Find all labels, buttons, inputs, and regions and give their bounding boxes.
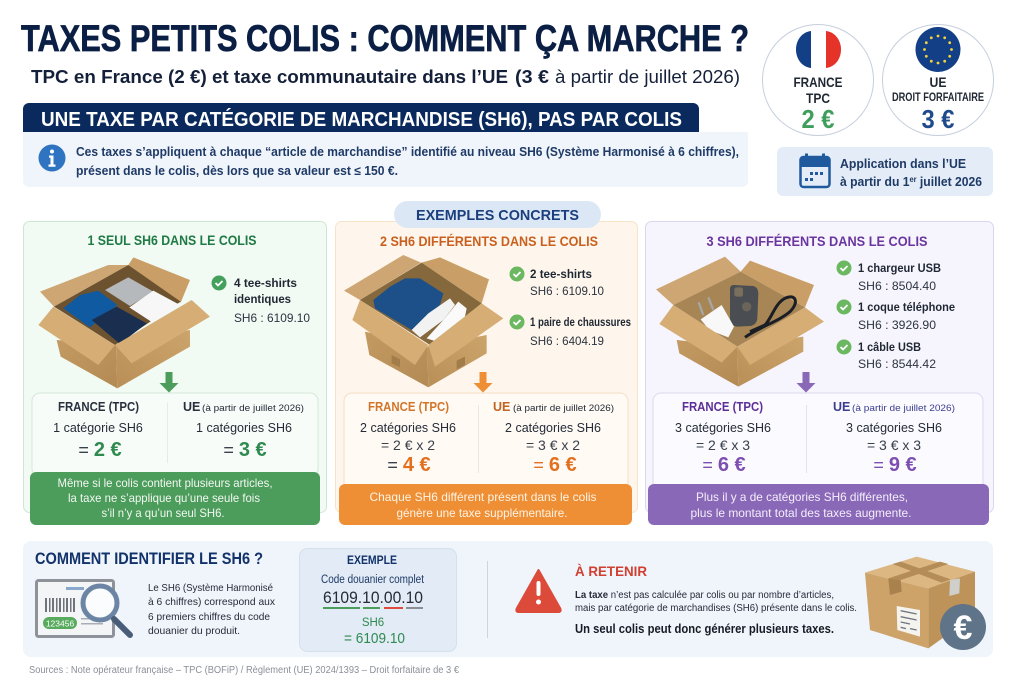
text: à retenir: mais par catégorie de marchandises (SH6) présente dans le colis.: [575, 603, 857, 614]
icon: calendar: [800, 154, 830, 187]
result box: UE: [833, 400, 850, 414]
icon: closed box with euro: [865, 557, 986, 650]
result box: UE: [493, 400, 510, 414]
note: [30, 472, 320, 525]
result box: = 3 € x 2: [526, 437, 580, 453]
subtitle: (3 €: [515, 66, 549, 87]
application text: Application dans l’UE: [840, 156, 966, 171]
icon: EU flag: [916, 27, 960, 72]
info box: [23, 132, 748, 187]
pill: exemples concrets: [394, 201, 601, 228]
item list: 1 coque téléphone: [858, 300, 955, 314]
icon: info: [38, 144, 66, 172]
application text: [840, 156, 982, 189]
note: génère une taxe supplémentaire.: [396, 506, 568, 520]
item list: SH6 : 6404.19: [530, 334, 604, 348]
info text: présent dans le colis, dès lors que sa valeur est ≤ 150 €.: [76, 164, 398, 178]
item list: SH6 : 8544.42: [858, 357, 936, 371]
example box: Code douanier complet: [321, 574, 425, 586]
result box: FRANCE (TPC): [682, 400, 763, 414]
result box: = 2 €: [78, 439, 122, 461]
result box: = 2 € x 2: [381, 437, 435, 453]
text: SH6 explanation: Le SH6 (Système Harmonisé: [148, 582, 273, 594]
item list: [212, 276, 310, 325]
example box: SH6: [362, 617, 384, 629]
badge: France TPC: 2 €: [802, 104, 834, 134]
item list: 1 chargeur USB: [858, 261, 941, 275]
result box: = 3 €: [223, 439, 267, 461]
result box: = 6 €: [702, 454, 746, 476]
result box: [653, 393, 983, 491]
panel heading: 2 SH6 DIFFÉRENTS DANS LE COLIS: [380, 233, 598, 249]
item list: 1 paire de chaussures: [530, 315, 631, 329]
result box: 3 catégories SH6: [846, 421, 942, 435]
badge: UE droit forfaitaire: [882, 24, 994, 136]
application text: er: [909, 175, 917, 184]
result box: = 3 € x 3: [867, 437, 921, 453]
note: plus le montant total des taxes augmente.: [690, 506, 912, 520]
item list: 1 câble USB: [858, 340, 921, 354]
result box: [32, 393, 318, 477]
subtitle: TPC en France (2 €) et taxe communautaire dans l’UE: [31, 66, 508, 87]
note: [339, 484, 632, 525]
note: Chaque SH6 différent présent dans le colis: [370, 490, 596, 504]
result box: (à partir de juillet 2026): [513, 403, 614, 414]
text: à retenir: Un seul colis peut donc générer plusieurs taxes.: [575, 622, 834, 636]
result box: = 2 € x 3: [696, 437, 750, 453]
example box: 6109.10.00.10: [323, 588, 423, 607]
badge: UE droit forfaitaire: DROIT FORFAITAIRE: [892, 90, 984, 104]
panel heading: 3 SH6 DIFFÉRENTS DANS LE COLIS: [706, 233, 928, 249]
result box: = 4 €: [387, 454, 431, 476]
text: SH6 explanation: à 6 chiffres) correspond aux: [148, 596, 276, 608]
item list: SH6 : 6109.10: [234, 311, 310, 325]
badge: UE droit forfaitaire: 3 €: [922, 104, 954, 134]
item list: SH6 : 3926.90: [858, 318, 936, 332]
item list: 2 tee-shirts: [530, 267, 592, 281]
icon: closed box with euro: €: [954, 609, 973, 647]
note: [648, 484, 989, 525]
arrow down: [474, 372, 492, 392]
info text: [76, 145, 739, 178]
text: SH6 explanation: [148, 582, 276, 637]
result box: 2 catégories SH6: [360, 421, 456, 435]
icon: French flag: [796, 31, 841, 68]
icon: barcode label and magnifier: 123456: [46, 618, 74, 628]
icon: box with tee-shirts: [38, 257, 210, 388]
result box: UE: [183, 400, 200, 414]
panel: 1 SH6: [24, 222, 326, 525]
item list: SH6 : 8504.40: [858, 279, 936, 293]
badge: France TPC: FRANCE: [794, 74, 842, 90]
info text: Ces taxes s’appliquent à chaque “article de marchandise” identifié au niveau SH6 (Système Harmonisé à 6 chiffres),: [76, 145, 739, 159]
badge: France TPC: TPC: [806, 90, 830, 106]
result box: (à partir de juillet 2026): [202, 403, 304, 414]
arrow down: [160, 372, 178, 392]
note: s’il n’y a qu’un seul SH6.: [102, 506, 224, 520]
note: Même si le colis contient plusieurs articles,: [58, 476, 272, 490]
note: la taxe ne s’applique qu’une seule fois: [68, 491, 260, 505]
text: à retenir: À RETENIR: [575, 563, 647, 579]
result box: 1 catégories SH6: [196, 421, 292, 435]
badge: UE droit forfaitaire: UE: [930, 74, 946, 90]
application text: à partir du 1: [840, 174, 914, 189]
panel heading: 1 SEUL SH6 DANS LE COLIS: [88, 232, 256, 248]
text: à retenir: [575, 563, 857, 636]
icon: box with charger, phone case and cable: [656, 257, 824, 387]
text: SH6 explanation: douanier du produit.: [148, 625, 240, 637]
sources: Sources : Note opérateur française – TPC (BOFiP) / Règlement (UE) 2024/1393 – Droit forfaitaire de 3 €: [29, 665, 459, 676]
title: TAXES PETITS COLIS : COMMENT ÇA MARCHE ?: [21, 18, 749, 59]
heading: comment identifier: COMMENT IDENTIFIER LE SH6 ?: [35, 550, 263, 568]
result box: FRANCE (TPC): [58, 400, 139, 414]
result box: [344, 393, 628, 491]
section banner: UNE TAXE PAR CATÉGORIE DE MARCHANDISE (SH6), PAS PAR COLIS: [41, 108, 682, 131]
result box: 1 catégorie SH6: [53, 421, 143, 435]
item list: identiques: [234, 292, 291, 306]
note: Plus il y a de catégories SH6 différentes,: [696, 490, 908, 504]
text: SH6 explanation: 6 premiers chiffres du code: [148, 611, 270, 623]
item list: [836, 260, 955, 371]
item list: SH6 : 6109.10: [530, 284, 604, 298]
example box: = 6109.10: [344, 630, 405, 647]
example box: EXEMPLE: [347, 553, 397, 567]
badge: France TPC: [762, 24, 874, 136]
result box: (à partir de juillet 2026): [852, 403, 955, 414]
icon: box with tee-shirts and shoes: [344, 255, 503, 387]
application text: juillet 2026: [917, 174, 982, 189]
arrow down: [796, 372, 816, 392]
item list: 4 tee-shirts: [234, 276, 297, 290]
text: à retenir: La taxe n’est pas calculée par colis ou par nombre d’articles,: [575, 590, 834, 601]
icon: warning triangle: [516, 570, 561, 612]
panel: 2 SH6: [336, 222, 638, 525]
icon: barcode label and magnifier: [36, 580, 130, 636]
item list: [510, 266, 631, 348]
panel: bottom: [23, 541, 993, 657]
subtitle: [31, 66, 740, 87]
result box: = 6 €: [533, 454, 577, 476]
application date box: [777, 147, 993, 196]
example box: [300, 548, 456, 652]
result box: 2 catégories SH6: [505, 421, 601, 435]
result box: = 9 €: [873, 454, 917, 476]
result box: FRANCE (TPC): [368, 400, 449, 414]
panel: 3 SH6: [646, 222, 994, 525]
pill: exemples concrets: EXEMPLES CONCRETS: [416, 207, 579, 224]
subtitle: à partir de juillet 2026): [555, 66, 740, 87]
result box: 3 catégories SH6: [675, 421, 771, 435]
